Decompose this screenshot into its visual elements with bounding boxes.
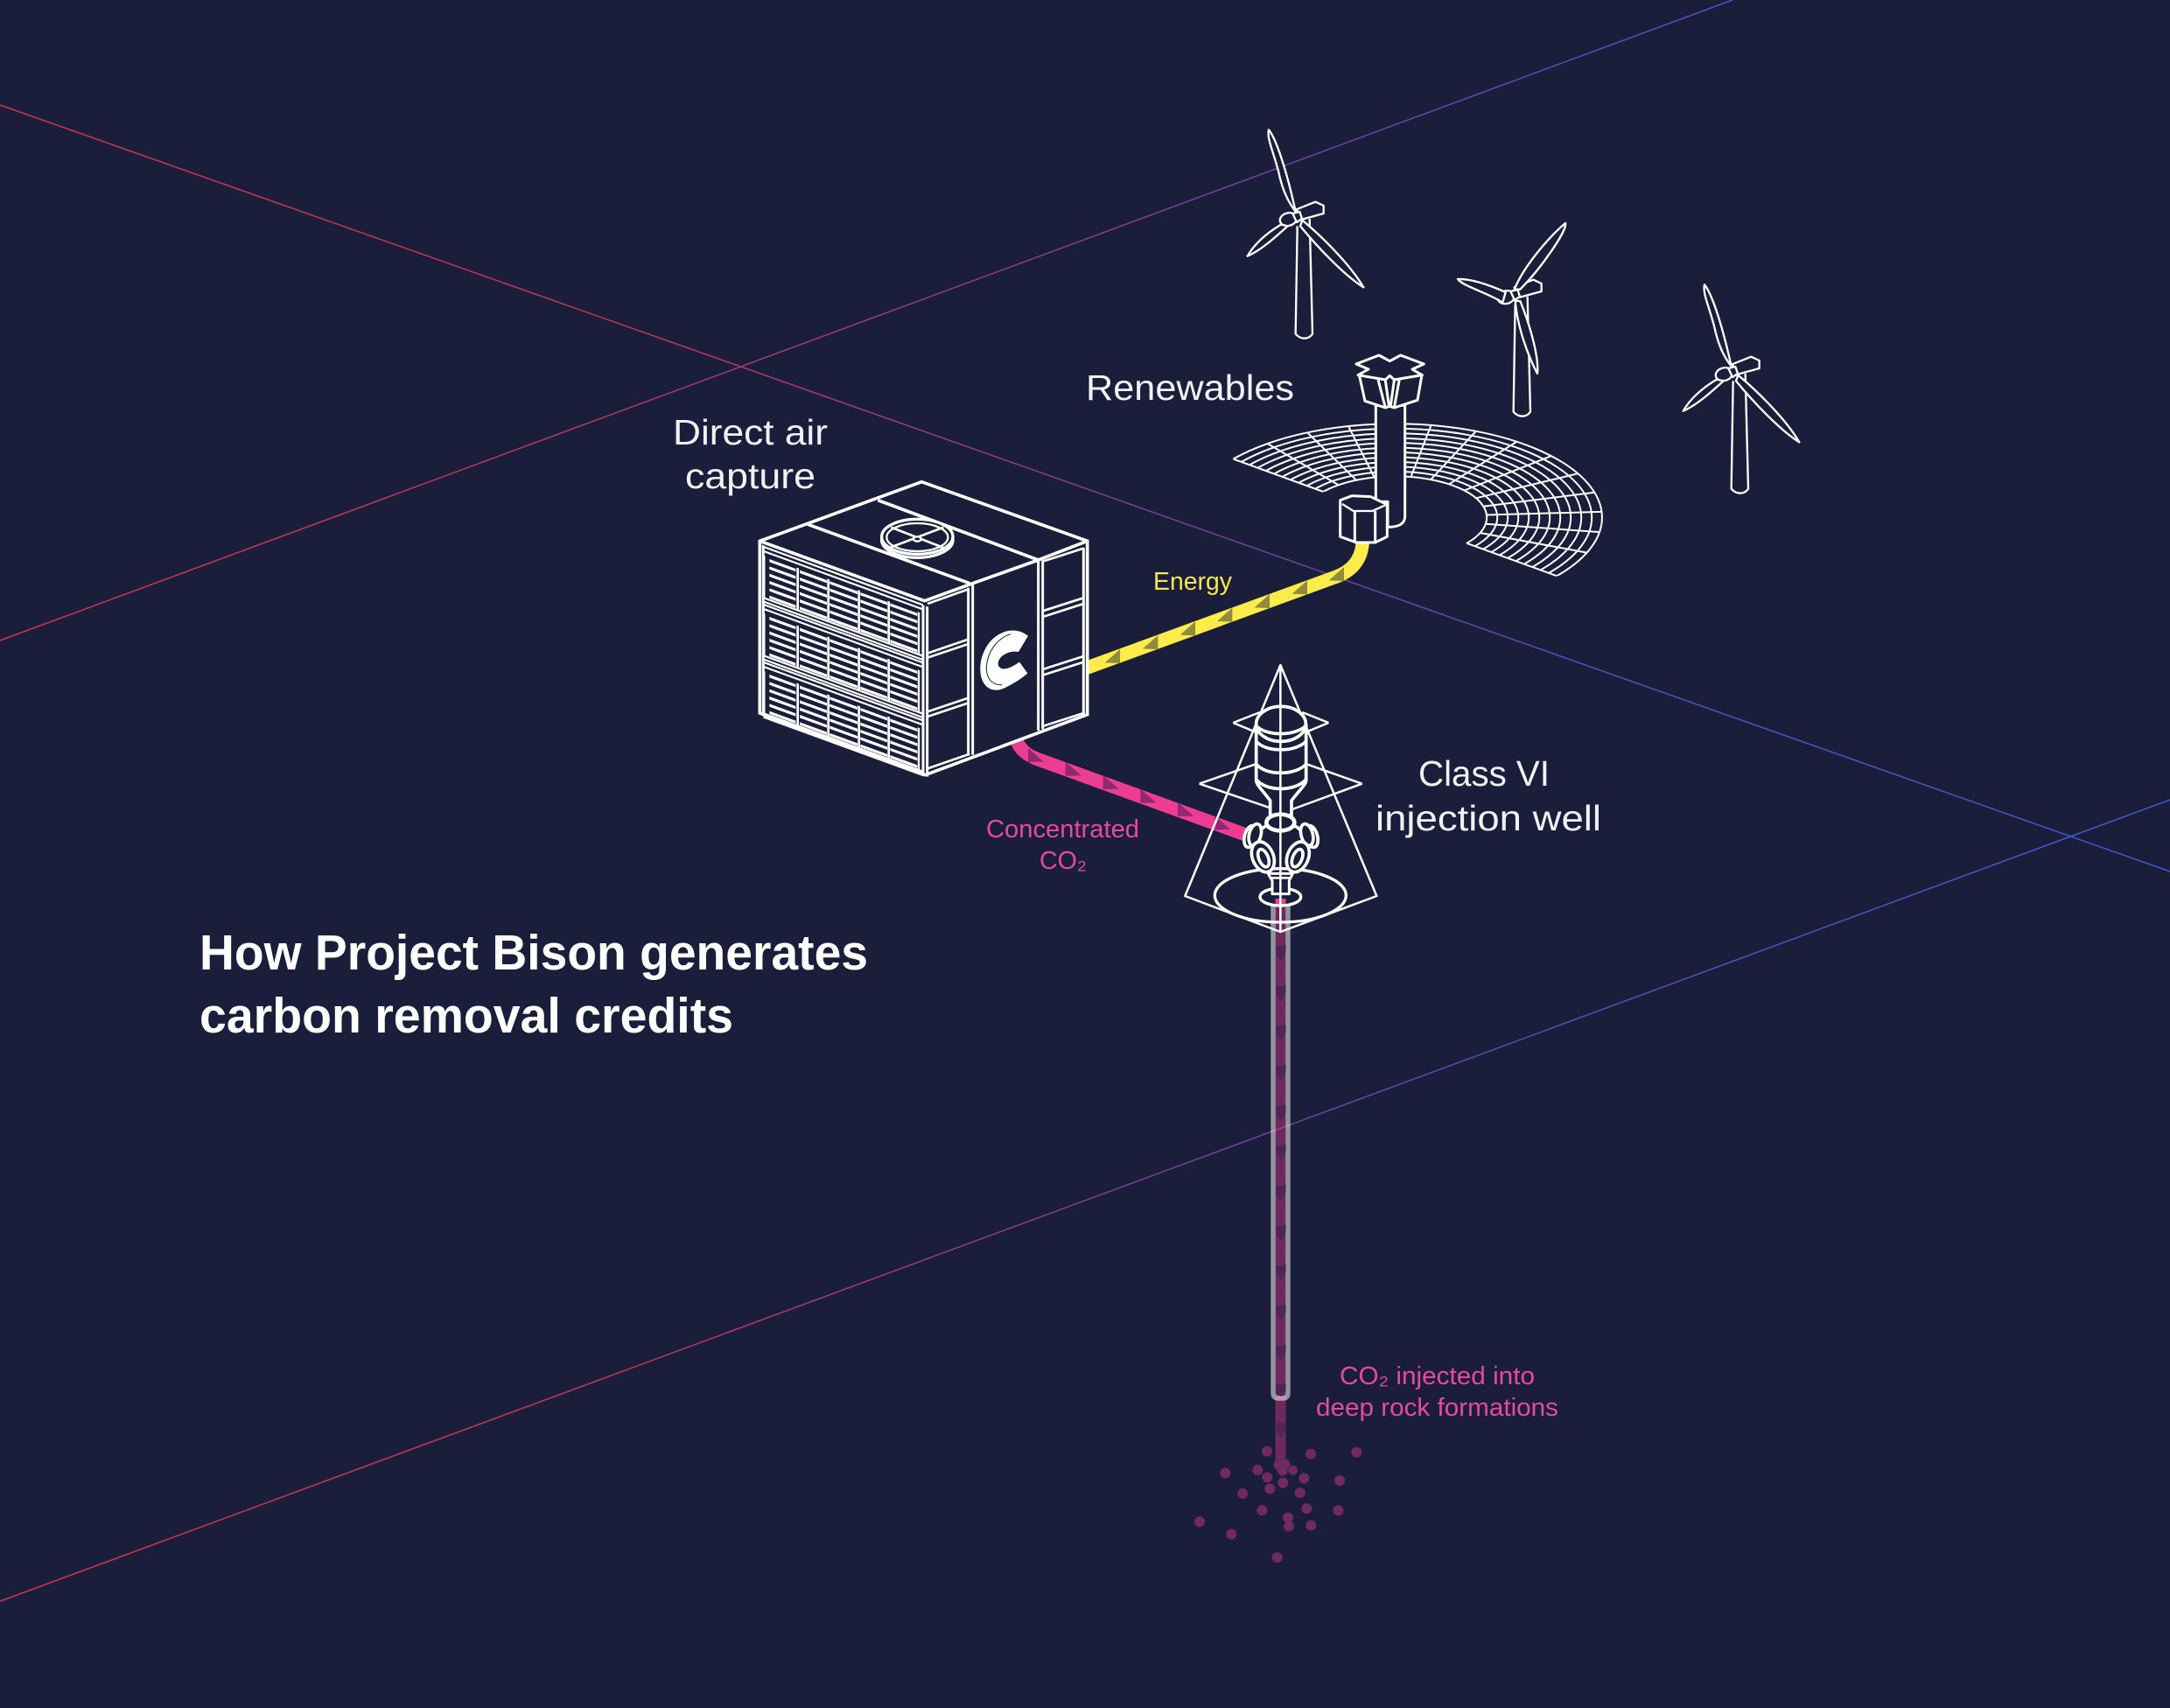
icon: Charm C logo — [980, 631, 1028, 690]
valve rings — [1242, 815, 1320, 894]
title: carbon removal credits — [200, 988, 733, 1044]
label: class VI injection well: injection well — [1376, 798, 1601, 838]
solar tower — [1356, 355, 1424, 527]
label: direct air capture — [673, 412, 828, 496]
label: class VI injection well: Class VI — [1418, 753, 1550, 794]
label: renewables: Renewables — [1086, 368, 1294, 408]
direct air capture unit — [760, 482, 1088, 777]
unit body and top face — [760, 482, 1088, 775]
CO2 dispersed dots — [1194, 1446, 1362, 1563]
concentrated CO2 pipe — [1017, 740, 1250, 836]
well centre line — [1278, 665, 1284, 932]
base ellipses — [1214, 869, 1346, 922]
icon: wind turbine 1 — [1248, 130, 1363, 339]
energy pipe — [1085, 540, 1362, 668]
injection pipe underground — [1273, 899, 1288, 1464]
label: concentrated CO2: CO₂ — [1040, 847, 1087, 875]
title — [200, 925, 868, 1044]
title: How Project Bison generates — [200, 925, 868, 981]
right side panels — [928, 548, 1083, 768]
icon: wind turbine 3 — [1684, 284, 1799, 494]
well pyramid frame — [1185, 665, 1376, 932]
solar mirror field — [1232, 423, 1603, 578]
label: direct air capture: capture — [685, 456, 816, 496]
label: direct air capture: Direct air — [673, 412, 828, 452]
storage tank — [1340, 496, 1387, 542]
label: energy: Energy — [1153, 568, 1232, 596]
label: CO2 injected into deep rock formations: CO₂ injected into — [1340, 1362, 1535, 1390]
label: class VI injection well — [1376, 753, 1601, 838]
label: concentrated CO2 — [986, 816, 1139, 875]
icon: roof fan — [882, 519, 953, 557]
left louvre face — [763, 545, 928, 777]
class VI injection well — [1185, 665, 1376, 932]
wellhead cylinder — [1256, 706, 1306, 816]
label: concentrated CO2: Concentrated — [986, 816, 1139, 844]
label: CO2 injected into deep rock formations — [1316, 1362, 1558, 1422]
icon: wind turbine 2 — [1458, 223, 1565, 416]
label: CO2 injected into deep rock formations: deep rock formations — [1316, 1394, 1558, 1422]
